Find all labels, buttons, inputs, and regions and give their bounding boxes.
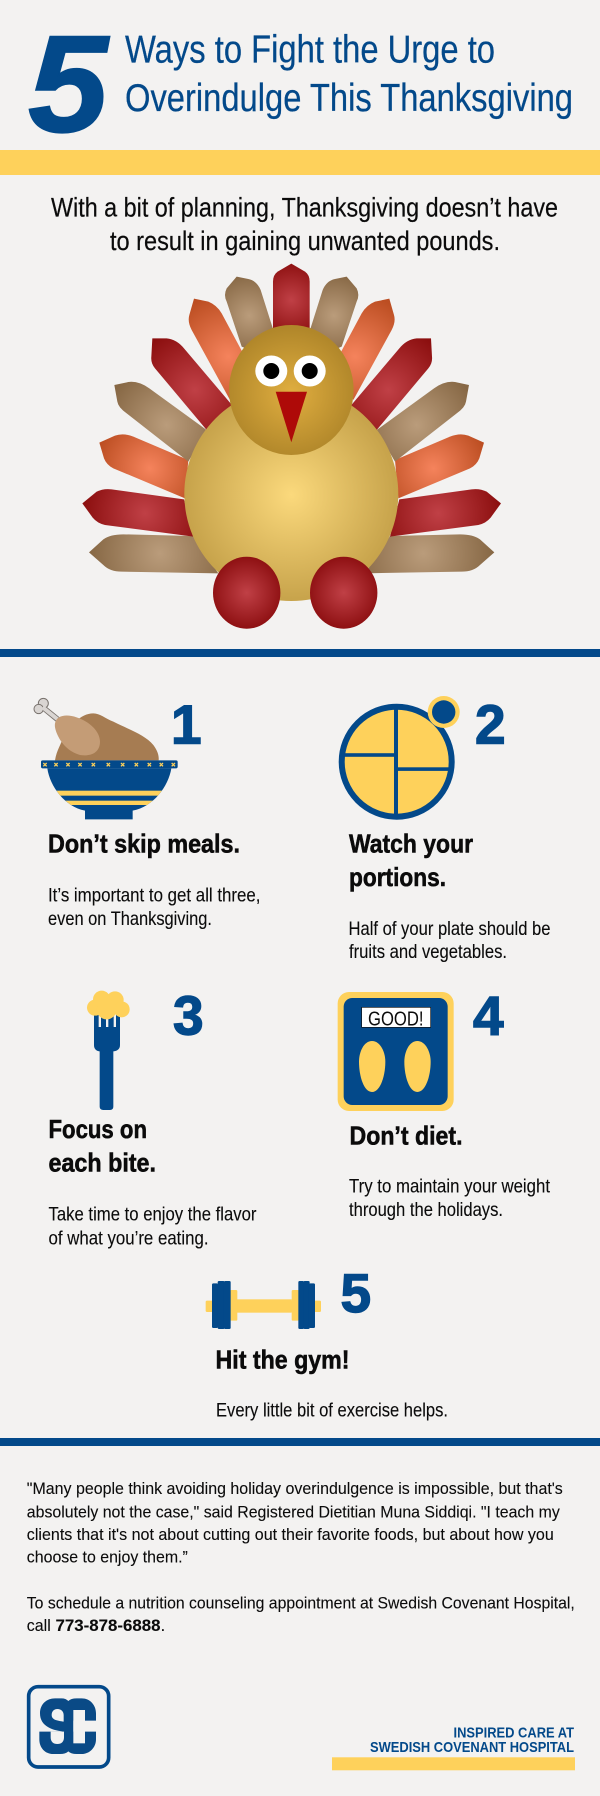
icon: fork with food bbox=[87, 991, 130, 1110]
intro text: to result in gaining unwanted pounds. bbox=[110, 226, 500, 256]
tagline bbox=[370, 1724, 574, 1756]
description 2 bbox=[348, 918, 550, 963]
icon: bathroom scale bbox=[338, 992, 454, 1111]
icon: divided plate bbox=[342, 696, 460, 818]
number 3: 3 bbox=[173, 984, 204, 1046]
left eye bbox=[255, 356, 287, 386]
title line 1: Ways to Fight the Urge to bbox=[125, 29, 495, 72]
right eye bbox=[294, 356, 326, 386]
description 2: Half of your plate should be bbox=[348, 918, 550, 940]
heading 2: portions. bbox=[349, 862, 446, 892]
divider bbox=[0, 1438, 600, 1446]
number 5: 5 bbox=[340, 1262, 371, 1324]
heading 2: Watch your bbox=[349, 829, 473, 859]
description 3 bbox=[48, 1204, 257, 1249]
scale display text: GOOD! bbox=[368, 1008, 424, 1031]
description 1: even on Thanksgiving. bbox=[48, 908, 212, 930]
heading 1: Don’t skip meals. bbox=[48, 829, 240, 859]
tagline: INSPIRED CARE AT bbox=[454, 1724, 574, 1741]
description 4: through the holidays. bbox=[349, 1199, 503, 1221]
title bbox=[28, 8, 573, 162]
heading 3: Focus on bbox=[48, 1114, 147, 1144]
description 1: It’s important to get all three, bbox=[48, 884, 260, 906]
quote text bbox=[27, 1479, 563, 1567]
big number 5: 5 bbox=[28, 8, 110, 162]
turkey body bbox=[184, 387, 398, 601]
quote text: "Many people think avoiding holiday overindulgence is impossible, but that's bbox=[27, 1479, 563, 1498]
quote text: absolutely not the case," said Registered Dietitian Muna Siddiqi. "I teach my bbox=[27, 1502, 560, 1521]
description 5: Every little bit of exercise helps. bbox=[216, 1400, 448, 1422]
heading 5: Hit the gym! bbox=[216, 1344, 350, 1374]
right foot bbox=[310, 557, 377, 629]
logo: Swedish Covenant Hospital bbox=[29, 1687, 109, 1767]
heading 3: each bite. bbox=[48, 1148, 156, 1178]
tip 5 bbox=[206, 1262, 448, 1422]
number 1: 1 bbox=[171, 694, 202, 756]
heading 2 bbox=[349, 829, 473, 892]
turkey illustration bbox=[82, 264, 501, 629]
call to action text: To schedule a nutrition counseling appointment at Swedish Covenant Hospital, bbox=[27, 1593, 575, 1612]
call to action text: call bbox=[27, 1616, 51, 1635]
tagline yellow bar bbox=[332, 1757, 575, 1770]
icon: dumbbell bbox=[206, 1281, 321, 1329]
divider bbox=[0, 649, 600, 657]
turkey head bbox=[229, 325, 354, 455]
description 4 bbox=[349, 1175, 550, 1221]
tip 3 bbox=[48, 984, 257, 1249]
heading 4: Don’t diet. bbox=[350, 1120, 462, 1150]
beak bbox=[276, 392, 307, 442]
quote text: choose to enjoy them.” bbox=[27, 1548, 188, 1567]
tip 4 bbox=[338, 984, 550, 1221]
tip 2 bbox=[342, 694, 550, 963]
call to action text: 773-878-6888 bbox=[56, 1616, 160, 1635]
description 4: Try to maintain your weight bbox=[349, 1175, 550, 1197]
intro text bbox=[51, 193, 558, 256]
number 4: 4 bbox=[473, 984, 504, 1046]
description 3: of what you’re eating. bbox=[48, 1227, 208, 1249]
call to action text bbox=[27, 1593, 575, 1635]
heading 3 bbox=[48, 1114, 156, 1178]
description 1 bbox=[48, 884, 260, 930]
left foot bbox=[213, 557, 280, 629]
tip 1 bbox=[34, 694, 260, 930]
feathers bbox=[82, 264, 501, 573]
call to action text: . bbox=[160, 1616, 165, 1635]
description 2: fruits and vegetables. bbox=[349, 941, 507, 963]
yellow band bbox=[0, 150, 600, 175]
description 3: Take time to enjoy the flavor bbox=[48, 1204, 257, 1226]
icon: roast turkey in bowl bbox=[34, 698, 178, 819]
number 2: 2 bbox=[475, 694, 506, 756]
quote text: clients that it's not about cutting out their favorite foods, but about how you bbox=[27, 1525, 554, 1544]
